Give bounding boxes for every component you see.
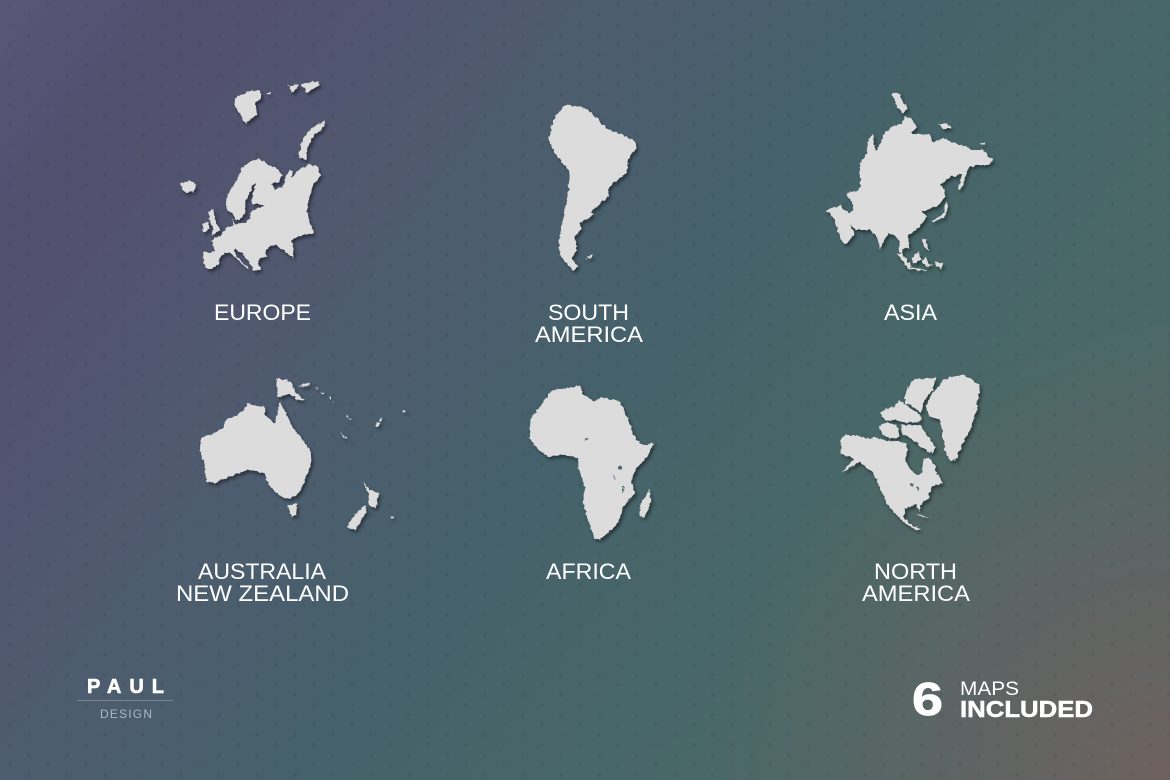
- label: South America: AMERICA: [535, 322, 643, 347]
- map: Europe: [180, 81, 325, 271]
- map: Africa: [530, 386, 653, 539]
- map: Australia and New Zealand: [200, 377, 406, 530]
- label: North America: [862, 559, 970, 606]
- callout: 6 maps included: [912, 673, 1093, 725]
- logo: Paul Design: PAUL: [87, 676, 164, 698]
- map: South America: [548, 105, 636, 271]
- map: Asia: [826, 93, 993, 271]
- callout: 6 maps included: INCLUDED: [960, 696, 1093, 722]
- label: Australia New Zealand: NEW ZEALAND: [176, 581, 349, 606]
- callout: 6 maps included: 6: [912, 673, 943, 725]
- logo: Paul Design: DESIGN: [100, 707, 152, 721]
- label: Europe: EUROPE: [214, 300, 311, 325]
- label: North America: AMERICA: [862, 581, 970, 606]
- label: Asia: ASIA: [884, 300, 937, 325]
- label: South America: SOUTH: [548, 300, 629, 325]
- label: South America: [535, 300, 643, 347]
- logo: Paul Design: [77, 676, 173, 721]
- label: Australia New Zealand: AUSTRALIA: [198, 559, 326, 584]
- label: Australia New Zealand: [176, 559, 349, 606]
- label: North America: NORTH: [874, 559, 957, 584]
- label: Africa: AFRICA: [546, 559, 631, 584]
- map: North America: [840, 375, 980, 530]
- callout: 6 maps included: MAPS: [960, 679, 1019, 700]
